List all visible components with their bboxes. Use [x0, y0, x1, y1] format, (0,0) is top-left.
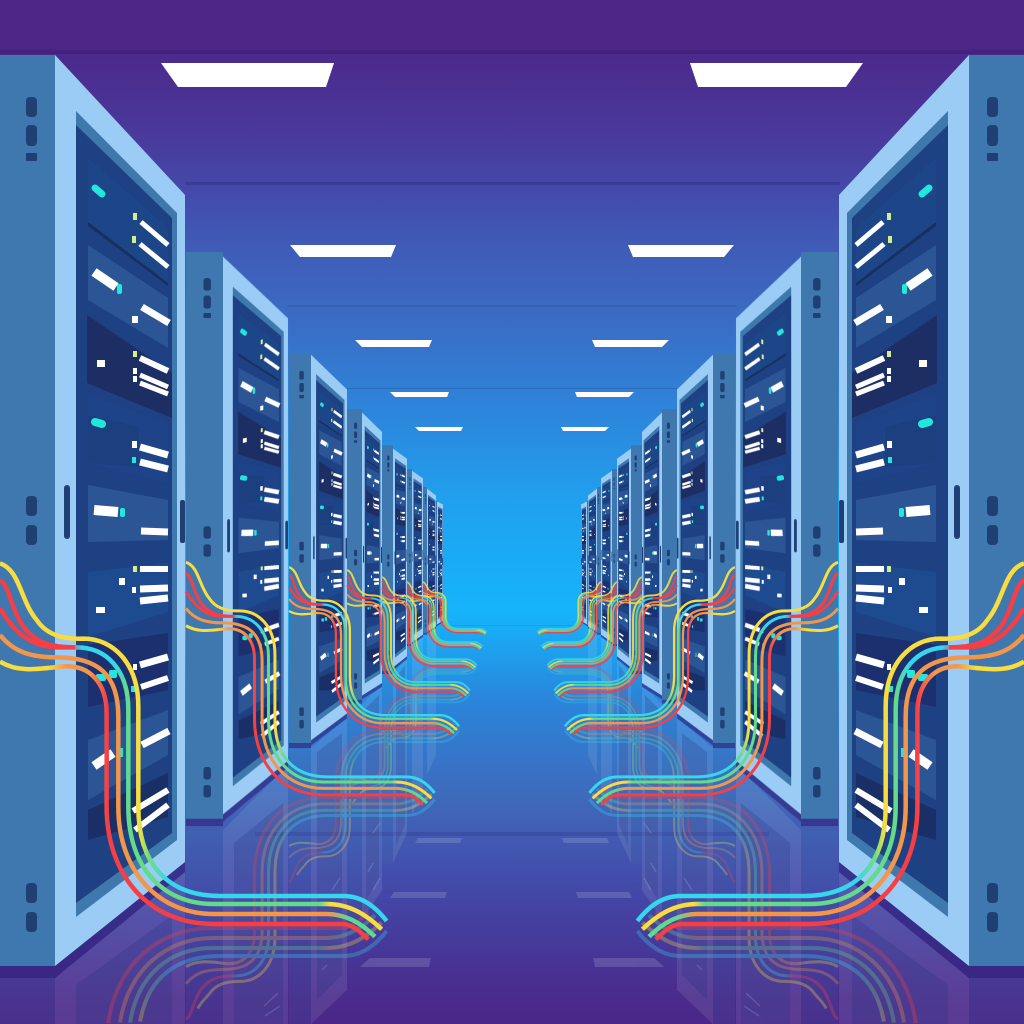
ceiling lights, left	[161, 63, 463, 431]
cable floor reflections, right	[547, 663, 916, 1023]
cable floor reflections, left	[108, 663, 477, 1023]
rack front 7	[427, 488, 436, 634]
rack front 4	[362, 412, 382, 700]
rack front 3	[677, 354, 713, 746]
rack front 1	[839, 55, 969, 978]
floor light reflections	[360, 838, 664, 967]
rack front 6	[601, 470, 612, 644]
rack front 7	[588, 488, 597, 634]
rack front 8	[581, 502, 587, 626]
ceiling cross beams and floor seams	[185, 182, 840, 836]
rack front 3	[311, 354, 347, 746]
rack front 5	[393, 448, 407, 670]
rack front 2	[736, 256, 801, 822]
rack side faces, right	[587, 55, 1024, 978]
cable bundles, left row	[0, 562, 487, 939]
rack floor reflections, left	[0, 628, 436, 1024]
rack side faces, left	[0, 55, 437, 978]
cable bundles, right row	[537, 562, 1024, 939]
rack front 8	[437, 502, 443, 626]
rack front 4	[642, 412, 662, 700]
rack front 1	[55, 55, 185, 978]
rack front 2	[223, 256, 288, 822]
rack front 5	[617, 448, 631, 670]
rack front 6	[412, 470, 423, 644]
ceiling top band	[0, 0, 1024, 54]
ceiling lights, right	[561, 63, 863, 431]
rack floor reflections, right	[588, 628, 1024, 1024]
